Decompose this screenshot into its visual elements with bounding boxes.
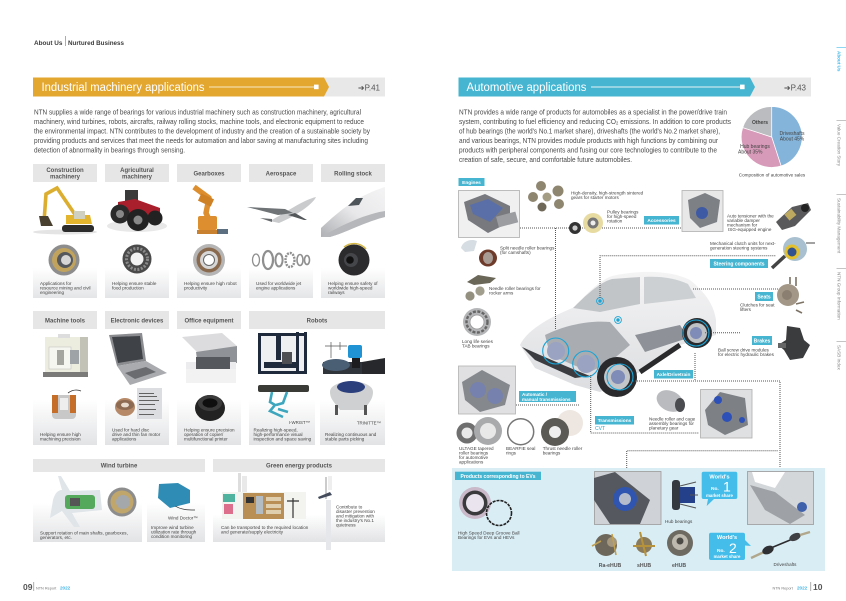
panel: machine tools	[33, 311, 97, 445]
text: driveshafts: Driveshafts	[774, 562, 797, 567]
footer left: NTN Report	[36, 586, 57, 590]
intro text: industrial: the environmental impact. NTN contributes to the development of industry and the creation of a sustainable society by	[34, 126, 370, 136]
image: accessories engine	[682, 190, 723, 232]
text: seal rings: BEARFIE seal	[506, 446, 535, 451]
text: pulley bearings: Pulley bearings	[607, 210, 639, 214]
intro text: automotive: system, contributing to fuel efficiency and reducing CO₂ emissions. In addition to core products	[459, 117, 731, 126]
icon: sintered gears	[528, 181, 564, 212]
icon: tractor	[107, 190, 167, 232]
label: steering components: Steering components	[713, 262, 765, 268]
label: products corresponding to EVs	[455, 472, 541, 480]
label: seats: Seats	[757, 294, 771, 300]
text: auto tensioner: ISG-equipped engine	[728, 227, 772, 232]
panel: gearboxes	[177, 164, 241, 298]
icon: pulley bearings	[569, 213, 603, 234]
text: tapered bearings: ULTAGE tapered	[459, 446, 494, 451]
icon: bearing and shaft	[115, 388, 162, 419]
icon: driveshaft	[751, 531, 810, 558]
footer left: 2022	[60, 586, 71, 590]
icon: black seal	[195, 395, 225, 421]
panel: wind turbine: Wind turbine	[101, 464, 138, 470]
panel: construction machinery: engineering	[40, 290, 64, 295]
panel: robots: Robots	[307, 318, 328, 324]
icon: I-WRIST robot	[258, 385, 309, 417]
icon: cylindrical roller bearing	[193, 244, 225, 276]
icon: bearing rings	[252, 251, 310, 269]
intro text: industrial: providing products and services that meet the needs for automation and labor saving at manufacturing sites including	[34, 136, 368, 145]
panel: green energy products: disaster prevention	[336, 509, 375, 514]
page header: Nurtured Business	[68, 40, 124, 47]
text: hub bearings: Hub bearings	[665, 519, 693, 524]
text: sintered gears: gears for starter motors	[571, 195, 619, 200]
sidebar navigation: Value Creation Story	[836, 124, 842, 167]
image: I-WRIST machine	[258, 332, 307, 374]
panel: office equipment: operation of copier/	[184, 432, 224, 437]
page header	[34, 36, 124, 47]
panel: construction machinery: Applications for	[40, 281, 72, 286]
intro text: industrial: NTN supplies a wide range of bearings for various industrial machinery such as construction machinery, agricultural	[34, 108, 361, 116]
text: split needle	[500, 246, 555, 255]
panel: robots: TRINITTE™	[357, 420, 381, 426]
pie chart: composition of automotive sales: Composition of automotive sales	[739, 172, 806, 178]
panel: aerospace	[247, 164, 316, 298]
pie chart: composition of automotive sales	[738, 106, 806, 178]
panel: green energy products: Contribute to	[336, 504, 363, 510]
icon: laptop	[109, 333, 167, 385]
icon: seat clutch	[777, 277, 804, 313]
pie chart: composition of automotive sales: About 45%	[780, 136, 805, 142]
icon: bullet train	[321, 187, 385, 237]
text: CVT: CVT	[595, 426, 605, 432]
text: brakes: for electric hydraulic brakes	[718, 352, 775, 357]
callout: world's no.2	[709, 533, 751, 560]
panel: construction machinery: machinery	[50, 174, 81, 180]
intro text: automotive: creation of safe, secure, and comfortable future automobiles.	[459, 155, 632, 164]
panel: construction machinery: resource mining and civil	[40, 286, 91, 290]
text: sintered gears	[571, 190, 644, 200]
label: transmissions: Transmissions	[598, 418, 632, 424]
panel: agricultural machinery: machinery	[122, 174, 153, 180]
text: seal rings: rings	[506, 450, 517, 456]
page header: About Us	[34, 40, 63, 47]
label: transmissions	[595, 416, 634, 424]
dotted leader lines	[516, 228, 780, 470]
icon: sHUB	[633, 532, 655, 556]
icon: turbine nacelle	[50, 476, 102, 527]
panel: machine tools: Machine tools	[45, 318, 86, 324]
panel: office equipment: Helping ensure precision	[184, 428, 235, 432]
panel: robots: stable parts picking	[325, 436, 365, 442]
panel: aerospace: engine applications	[256, 286, 296, 290]
image: hub cutaway	[594, 472, 661, 524]
panel: agricultural machinery: food production	[112, 286, 144, 290]
text: rocker arm	[489, 286, 541, 296]
pie chart: composition of automotive sales: Others	[752, 120, 768, 126]
text: hub product names: Ra-eHUB	[599, 563, 621, 569]
intro text: automotive: products with peripheral components and fusing our core technologies to contribute to the	[459, 146, 717, 154]
text: thrust bearings: Thrust needle roller	[543, 446, 583, 451]
text: auto tensioner: mechanism for	[727, 222, 758, 228]
text: auto tensioner: variable damper	[727, 218, 760, 223]
icon: tapered roller bearings	[456, 417, 502, 445]
intro text: automotive: of hub bearings (the world's No.1 market share), driveshafts (the world's No.2 market share),	[459, 126, 720, 136]
text: pulley bearings: for high-speed	[607, 214, 637, 219]
label: steering components	[710, 259, 768, 268]
text: thrust bearings: bearings	[543, 450, 561, 456]
text: thrust bearings	[543, 446, 583, 456]
panel: wind turbine: Improve wind turbine	[151, 525, 194, 530]
text: sintered gears: High-density, high-strength sintered	[571, 190, 644, 196]
pie chart: composition of automotive sales: Hub bearings	[740, 144, 770, 150]
image: suspension cutaway	[748, 472, 814, 524]
panel: agricultural machinery: Agricultural	[120, 168, 154, 174]
text: tapered bearings: applications	[459, 460, 484, 464]
banner: automotive: ➜P.43	[784, 84, 807, 92]
label: accessories: Accessories	[647, 218, 676, 224]
text: seats: lifters	[740, 307, 752, 312]
panel: electronic devices: applications	[112, 436, 137, 442]
text: tapered bearings: for automotive	[459, 455, 489, 460]
panel: robots: I-WRIST™	[289, 420, 310, 425]
icon: tensioner	[776, 203, 811, 230]
text: planetary needle	[649, 416, 696, 430]
icon: machine tool	[43, 334, 88, 377]
panel: gearboxes: productivity	[184, 286, 208, 290]
icon: planetary needle bearing	[653, 386, 687, 416]
sidebar navigation: Sustainability Management	[836, 198, 842, 254]
text: mechanical clutch: generation steering systems	[710, 246, 768, 250]
text: brakes: Ball screw drive modules	[718, 348, 770, 352]
sidebar navigation	[836, 47, 846, 370]
footer right: 10	[813, 582, 823, 592]
banner: industrial machinery: Industrial machinery applications	[42, 82, 205, 94]
panel: robots: Realizing high-speed,	[254, 428, 298, 432]
banner: automotive: Automotive applications	[466, 82, 587, 94]
sidebar navigation: About Us	[836, 51, 842, 72]
icon: Wind Doctor box	[158, 483, 195, 510]
icon: steering clutch	[772, 237, 815, 268]
text: seats	[740, 302, 775, 312]
icon: Ra-eHUB	[592, 534, 617, 556]
panel: green energy products: and generate/supply electricity	[221, 530, 284, 534]
panel: rolling stock: Rolling stock	[334, 172, 372, 178]
image: planetary gear	[700, 390, 752, 438]
label: automatic manual transmissions: Automatic /	[522, 392, 548, 397]
pie chart: composition of automotive sales: About 35%	[738, 150, 763, 156]
image: transmission	[458, 366, 516, 414]
panel: electronic devices: Electronic devices	[111, 318, 164, 324]
intro text: automotive: and various bearings, NTN provides module products with high functions by combining our	[459, 136, 719, 145]
callout: world's no.1: World's	[709, 474, 730, 480]
intro text: industrial: detection of abnormality in bearings through sensing.	[34, 146, 185, 154]
panel: robots: Realizing continuous and	[325, 432, 377, 437]
text: planetary needle: planetary gear	[649, 426, 679, 430]
text: tapered bearings: roller bearings	[459, 450, 489, 456]
label: automatic manual transmissions: manual transmissions	[522, 397, 571, 402]
panel: gearboxes: Gearboxes	[193, 172, 225, 178]
panel: electronic devices	[105, 311, 169, 445]
image: container house	[222, 473, 306, 519]
panel: office equipment: Office equipment	[184, 318, 234, 324]
banner: automotive	[458, 78, 811, 96]
icon: eHUB	[667, 530, 693, 556]
panel: robots: inspection and space saving	[254, 436, 312, 442]
sidebar navigation: SASB Index	[836, 345, 842, 370]
banner: industrial machinery	[33, 78, 385, 96]
label: engines	[458, 178, 484, 186]
text: long life: TAB bearings	[462, 344, 490, 348]
panel: robots	[249, 311, 385, 445]
icon: airplane	[247, 197, 316, 223]
panel: products for EVs	[452, 468, 825, 571]
text: auto tensioner	[727, 214, 774, 232]
callout: world's no.1: 1	[723, 478, 731, 494]
text: tapered bearings	[459, 446, 494, 464]
panel: wind turbine: Support rotation of main shafts, gearboxes,	[40, 530, 128, 536]
image: engine	[458, 190, 520, 238]
panel: construction machinery: Construction	[46, 168, 84, 174]
callout: world's no.1	[702, 472, 737, 506]
label: brakes: Brakes	[754, 338, 771, 344]
icon: EV ball bearing and cage	[459, 487, 512, 526]
footer right	[772, 582, 823, 592]
callout: world's no.2: 2	[729, 540, 737, 556]
icon: thrust bearing	[541, 410, 583, 446]
panel: wind turbine: condition monitoring	[151, 534, 193, 539]
icon: double row bearing	[338, 244, 370, 276]
panel: green energy products: and mitigation with	[336, 514, 374, 518]
pie chart: composition of automotive sales: Driveshafts	[779, 131, 805, 137]
icon: industrial robot	[194, 187, 228, 234]
intro text: industrial: machinery, wind turbines, robots, aircrafts, railway rolling stocks, machine tools, and electronic equipment to reduce	[34, 117, 364, 126]
icon: hub bearing	[672, 480, 698, 510]
text: planetary needle: Needle roller and cage	[649, 416, 696, 422]
panel: green energy products: Green energy products	[266, 464, 333, 470]
panel: rolling stock: Helping ensure safety of	[328, 281, 378, 286]
panel: office equipment: multifunctional printer	[184, 436, 228, 442]
panel: wind turbine	[33, 459, 205, 542]
panel: agricultural machinery: Helping ensure stable	[112, 281, 157, 286]
text: planetary needle: assembly bearings for	[649, 421, 694, 426]
callout: world's no.2: market share	[714, 554, 741, 559]
icon: long life bearing	[463, 308, 491, 336]
callout: world's no.2: World's	[717, 535, 737, 541]
label: automatic manual transmissions	[519, 391, 576, 402]
panel: aerospace: Used for worldwide jet	[256, 281, 302, 286]
text: split needle: (for camshafts)	[500, 250, 531, 255]
footer left	[23, 582, 71, 592]
label: axle drivetrain: Axle/Drivetrain	[657, 372, 690, 378]
callout: world's no.1: market share	[706, 493, 733, 498]
panel: green energy products	[213, 459, 385, 550]
icon: seal ring	[508, 419, 534, 445]
label: seats	[755, 292, 773, 301]
panel: wind turbine: generators, etc.	[40, 535, 72, 540]
panel: green energy products: quietness	[336, 522, 356, 528]
text: seats: Clutches for seat	[740, 302, 775, 308]
text: long life: Long life series	[462, 339, 494, 344]
panel: aerospace: Aerospace	[266, 172, 297, 178]
panel: rolling stock	[321, 164, 385, 298]
panel: robots: high-performance visual	[254, 432, 303, 437]
intro text: industrial	[34, 108, 370, 154]
icon: split needle bearing	[461, 240, 497, 266]
callout: world's no.1: No.	[711, 486, 719, 492]
text: mechanical clutch: Mechanical clutch units for next-	[710, 241, 776, 246]
footer right: NTN Report	[772, 586, 794, 590]
text: rocker arm: rocker arms	[489, 290, 514, 296]
text: mechanical clutch	[710, 241, 776, 250]
panel: construction machinery	[33, 164, 97, 298]
panel: gearboxes: Helping ensure high robot	[184, 281, 237, 286]
text: pulley bearings	[607, 210, 639, 224]
text: EV bearing: Bearings for EVs and HEVs	[458, 535, 515, 540]
panel: green energy products: Can be transported to the required location	[221, 525, 309, 530]
icon: needle roller bearing	[122, 244, 152, 274]
text: seal rings	[506, 446, 535, 456]
text: rocker arm: Needle roller bearings for	[489, 286, 541, 291]
text: EV bearing	[458, 530, 520, 540]
icon: large bearing	[108, 488, 136, 516]
icon: TRINITTE unit	[330, 381, 373, 415]
icon: brake module	[778, 326, 810, 360]
panel: office equipment	[177, 311, 241, 445]
icon: solar pole	[318, 476, 332, 550]
image: TRINITTE machine	[322, 342, 385, 374]
icon: spherical roller bearing	[48, 244, 80, 276]
panel: machine tools: machining precision	[40, 436, 81, 442]
intro text: automotive	[459, 108, 731, 164]
sidebar navigation: NTN Group Information	[836, 272, 842, 320]
footer left: 09	[23, 582, 33, 592]
text: auto tensioner: Auto tensioner with the	[727, 214, 774, 218]
panel: green energy products: the industry's No.1	[336, 518, 374, 523]
icon: spindle bearing	[52, 390, 81, 419]
panel: rolling stock: railways	[328, 290, 345, 295]
text: brakes	[718, 348, 775, 357]
panel: electronic devices: drive and thin fan motor	[112, 432, 161, 437]
text: hub product names: eHUB	[672, 563, 686, 569]
label: brakes	[752, 336, 772, 345]
footer right: 2022	[797, 586, 808, 590]
intro text: automotive: NTN provides a wide range of products for automobiles as a specialist in the power/drive train	[459, 108, 727, 116]
icon: copier	[182, 333, 237, 383]
panel: machine tools: Helping ensure high	[40, 432, 81, 437]
text: EV bearing: High Speed Deep Groove Ball	[458, 530, 520, 536]
label: engines: Engines	[462, 180, 481, 186]
callout: world's no.2: No.	[717, 548, 725, 554]
label: products corresponding to EVs: Products corresponding to EVs	[460, 474, 536, 480]
text: hub product names	[599, 563, 686, 569]
panel: wind turbine: utilization rate through	[151, 530, 197, 534]
icon: excavator	[33, 188, 97, 234]
illustration: car cutaway	[520, 272, 716, 397]
panel: wind turbine: Wind Doctor™	[168, 516, 198, 520]
banner: industrial machinery: ➜P.41	[358, 84, 381, 92]
text: long life	[462, 339, 494, 348]
panel: electronic devices: Used for hard disc	[112, 428, 150, 432]
label: accessories	[644, 216, 679, 224]
text: hub product names: sHUB	[637, 563, 651, 569]
label: axle drivetrain	[654, 370, 693, 378]
text: split needle: Split needle roller bearings	[500, 246, 555, 250]
icon: rocker arm bearings	[465, 275, 496, 301]
panel: rolling stock: worldwide high-speed	[328, 286, 373, 290]
panel: agricultural machinery	[105, 164, 169, 298]
text: pulley bearings: rotation	[607, 218, 623, 224]
